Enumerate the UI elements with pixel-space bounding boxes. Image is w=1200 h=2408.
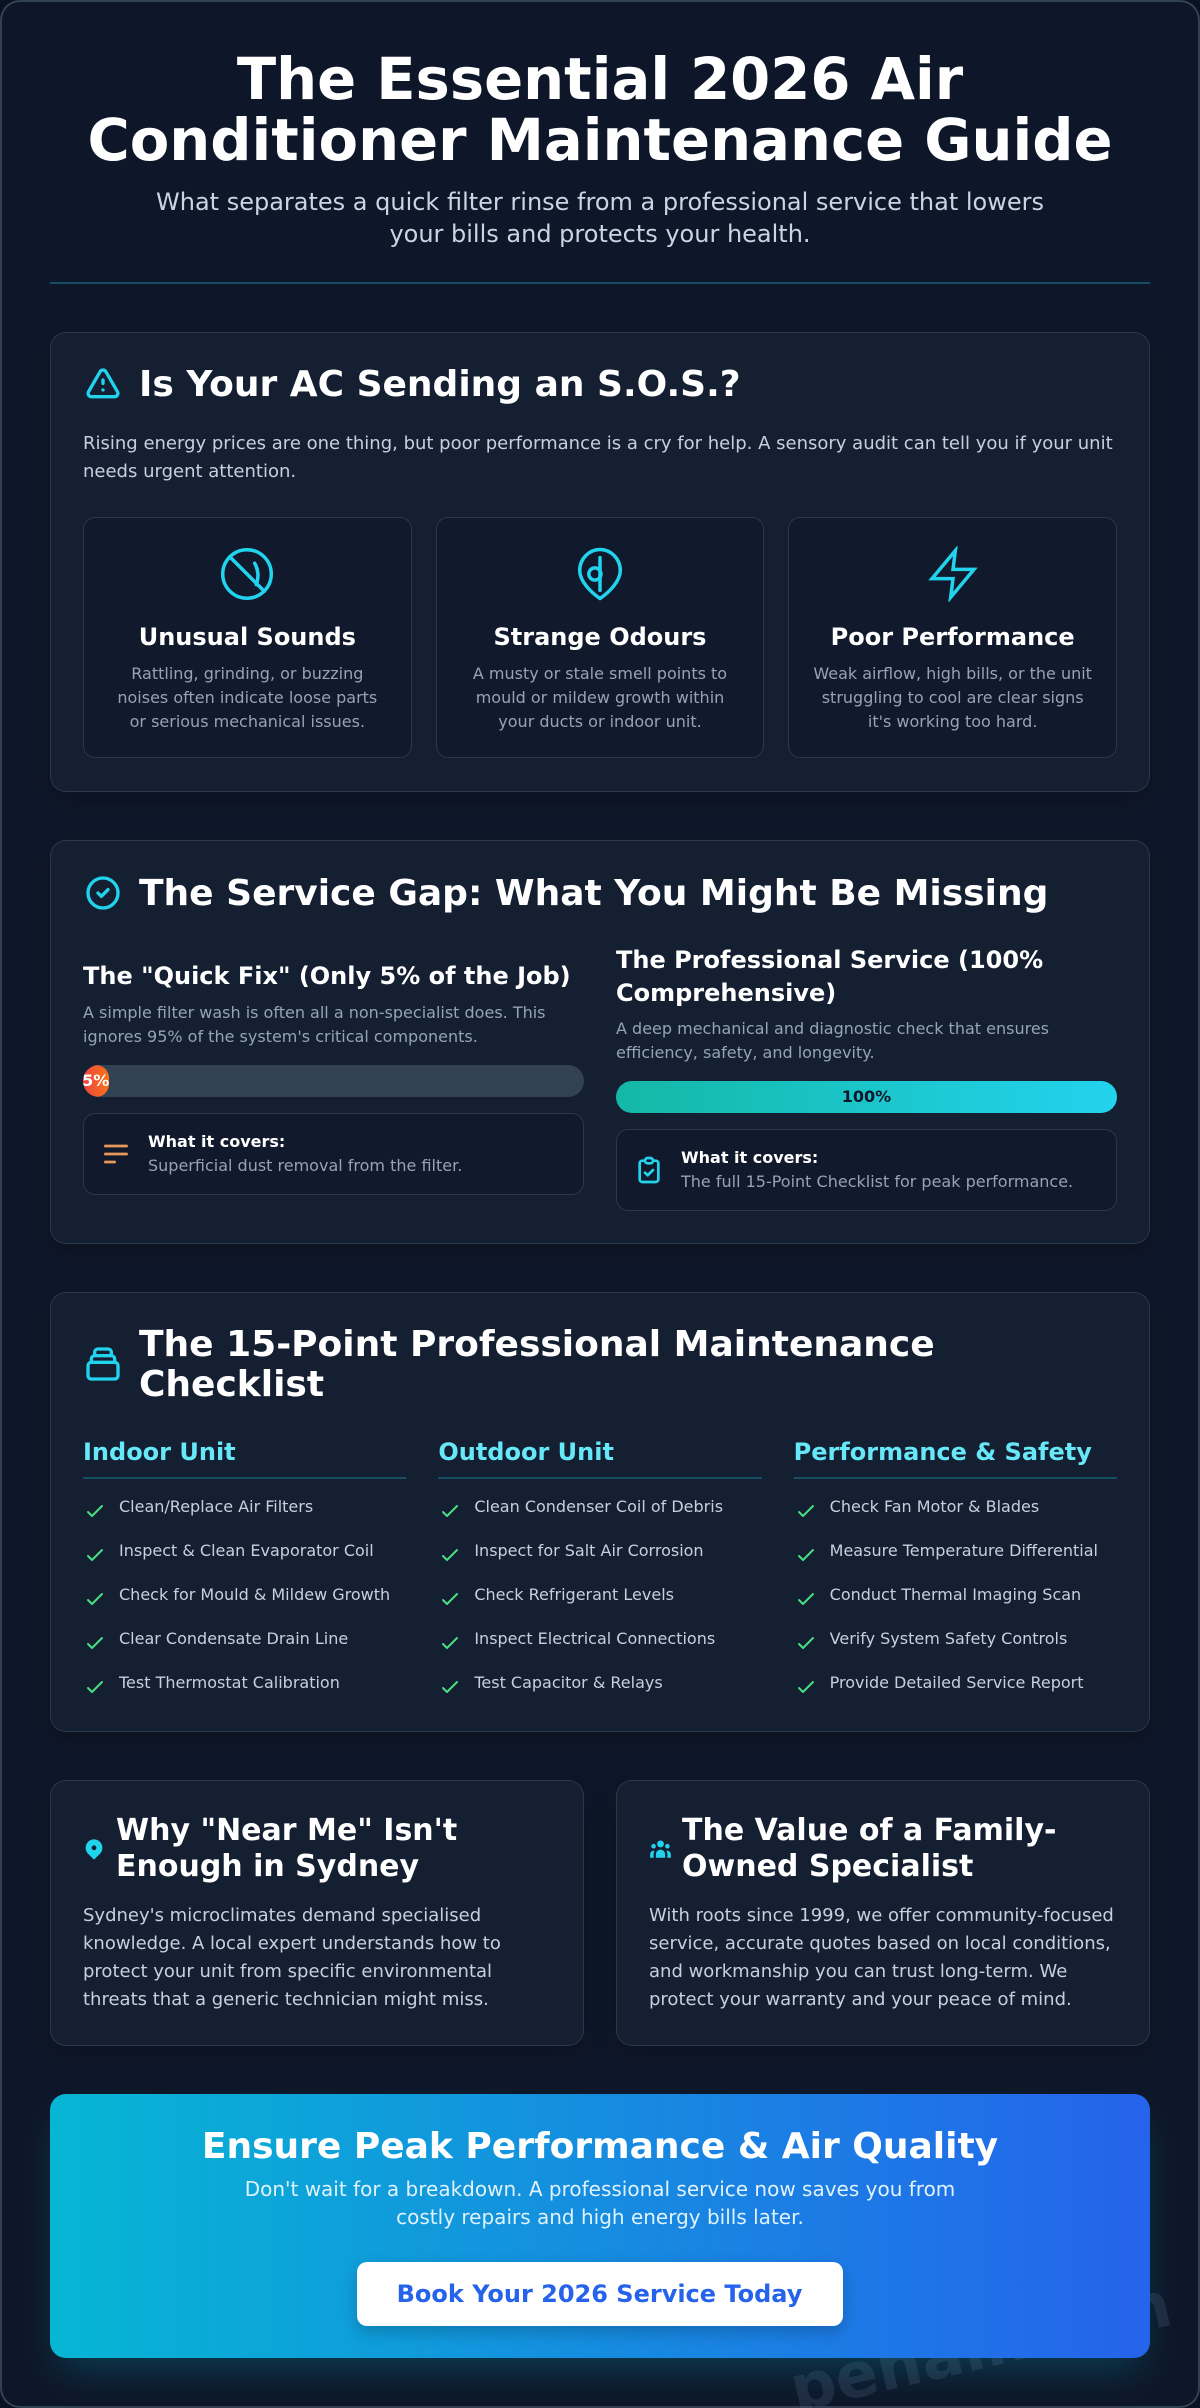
item: thermal imaging: Conduct Thermal Imaging Scan: [830, 1584, 1081, 1604]
text: near me: [83, 1902, 501, 2015]
panel: warning signs: [50, 332, 1150, 792]
icon: location pin: [86, 1839, 102, 1860]
description: strange odours: your ducts or indoor unit.: [498, 712, 702, 731]
panel: 15-point checklist: [50, 1292, 1150, 1732]
column: indoor unit: [83, 1438, 406, 1693]
column: performance and safety: [794, 1438, 1117, 1693]
heading: near me: Why "Near Me" Isn't: [116, 1813, 457, 1848]
icon: lightning bolt: [928, 546, 978, 602]
item: mould and mildew: Check for Mould & Mildew Growth: [119, 1584, 390, 1604]
heading: family owned: The Value of a Family-: [682, 1813, 1056, 1848]
progress bar: 5%: [83, 1065, 584, 1097]
icon: sound ban: [221, 548, 273, 600]
item: safety controls: Verify System Safety Controls: [830, 1628, 1067, 1648]
heading: service gap: The Service Gap: What You Might Be Missing: [139, 872, 1048, 914]
progress bar: 100%: 100%: [842, 1087, 891, 1106]
text: family owned: service, accurate quotes based on local conditions,: [649, 1933, 1111, 1954]
text: call to action: Don't wait for a breakdown. A professional service now saves you from: [245, 2176, 955, 2200]
item: condensate drain: Clear Condensate Drain Line: [119, 1628, 348, 1648]
heading: quick fix: The "Quick Fix" (Only 5% of the Job): [83, 962, 571, 990]
heading: near me: [116, 1813, 457, 1884]
description: quick fix: ignores 95% of the system's critical components.: [83, 1027, 478, 1046]
icon: check circle: [86, 876, 120, 910]
description: strange odours: mould or mildew growth within: [476, 688, 724, 707]
progress bar: 100%: [616, 1081, 1117, 1113]
text: near me: Sydney's microclimates demand specialised: [83, 1905, 481, 1926]
description: quick fix: A simple filter wash is often all a non-specialist does. This: [83, 1002, 546, 1022]
text: family owned: protect your warranty and your peace of mind.: [649, 1989, 1072, 2010]
heading: professional service: [616, 946, 1043, 1007]
text: near me: knowledge. A local expert understands how to: [83, 1933, 501, 1954]
label: what it covers: What it covers:: [148, 1132, 285, 1150]
heading: checklist: Checklist: [139, 1364, 324, 1405]
text: family owned: [649, 1902, 1114, 2015]
icon: short lines: [104, 1144, 128, 1164]
heading: professional service: The Professional Service (100%: [616, 946, 1043, 974]
description: unusual sounds: or serious mechanical issues.: [130, 712, 365, 731]
heading: professional service: Comprehensive): [616, 979, 836, 1007]
icon: people group: [648, 1837, 672, 1860]
text: quick fix coverage: Superficial dust removal from the filter.: [148, 1156, 462, 1175]
title: Conditioner Maintenance Guide: [87, 106, 1113, 174]
heading: poor performance: Poor Performance: [831, 623, 1075, 651]
intro text: needs urgent attention.: [83, 461, 296, 482]
heading: call to action: Ensure Peak Performance & Air Quality: [202, 2126, 998, 2166]
heading: performance and safety: Performance & Safety: [794, 1438, 1092, 1466]
item: condenser coil: Clean Condenser Coil of Debris: [474, 1496, 723, 1516]
text: call to action: costly repairs and high energy bills later.: [396, 2205, 804, 2229]
heading: family owned: [682, 1813, 1056, 1885]
intro text: [83, 432, 1113, 482]
heading: strange odours: Strange Odours: [494, 623, 706, 651]
button: book service: [356, 2262, 842, 2326]
subtitle: your bills and protects your health.: [389, 220, 811, 248]
icon: clipboard check: [638, 1156, 660, 1184]
description: poor performance: Weak airflow, high bills, or the unit: [813, 664, 1092, 682]
description: professional service: [616, 1018, 1049, 1062]
panel: family owned: [616, 1780, 1150, 2046]
item: evaporator coil: Inspect & Clean Evaporator Coil: [119, 1540, 374, 1560]
heading: family owned: Owned Specialist: [682, 1849, 973, 1884]
icon: warning triangle: [86, 368, 120, 398]
item: air filters: Clean/Replace Air Filters: [119, 1496, 313, 1516]
heading: checklist: The 15-Point Professional Maintenance: [139, 1324, 935, 1365]
text: near me: protect your unit from specific environmental: [83, 1961, 492, 1982]
heading: warning signs: Is Your AC Sending an S.O.S.?: [139, 364, 741, 405]
text: near me: threats that a generic technician might miss.: [83, 1989, 489, 2010]
item: service report: Provide Detailed Service Report: [830, 1672, 1084, 1692]
text: family owned: and workmanship you can trust long-term. We: [649, 1961, 1067, 1982]
heading: outdoor unit: Outdoor Unit: [438, 1438, 614, 1466]
item: capacitor: Test Capacitor & Relays: [474, 1672, 663, 1692]
subtitle: What separates a quick filter rinse from a professional service that lowers: [156, 188, 1044, 216]
text: family owned: With roots since 1999, we offer community-focused: [649, 1905, 1114, 1926]
callout: professional coverage: [616, 1129, 1117, 1211]
description: unusual sounds: Rattling, grinding, or buzzing: [131, 664, 363, 682]
item: electrical: Inspect Electrical Connections: [474, 1628, 715, 1648]
description: strange odours: A musty or stale smell points to: [473, 664, 727, 682]
column: professional service: [616, 946, 1117, 1211]
description: unusual sounds: [117, 664, 377, 731]
heading: checklist: [139, 1324, 935, 1405]
item: temperature: Measure Temperature Differential: [830, 1540, 1098, 1560]
card: strange odours: [436, 517, 764, 758]
subtitle: [156, 188, 1044, 248]
description: quick fix: [83, 1002, 546, 1046]
column: outdoor unit: [438, 1438, 762, 1693]
icon: stacked collection: [86, 1347, 120, 1381]
text: professional coverage: The full 15-Point Checklist for peak performance.: [681, 1172, 1073, 1191]
text: call to action: [50, 2174, 1150, 2231]
heading: unusual sounds: Unusual Sounds: [139, 623, 356, 651]
item: thermostat: Test Thermostat Calibration: [119, 1672, 340, 1692]
panel: near me: [50, 1780, 584, 2046]
item: refrigerant: Check Refrigerant Levels: [474, 1584, 674, 1604]
panel: service gap: [50, 840, 1150, 1244]
title: The Essential 2026 Air: [237, 46, 963, 113]
column: quick fix: [83, 962, 584, 1195]
label: what it covers: What it covers:: [681, 1148, 818, 1166]
bar fill: 5%: [83, 1065, 108, 1097]
description: professional service: efficiency, safety, and longevity.: [616, 1043, 875, 1062]
description: professional service: A deep mechanical and diagnostic check that ensures: [616, 1018, 1049, 1038]
description: poor performance: [813, 664, 1092, 731]
card: poor performance: [788, 517, 1117, 758]
heading: indoor unit: Indoor Unit: [83, 1438, 236, 1466]
description: poor performance: it's working too hard.: [868, 712, 1037, 731]
intro text: Rising energy prices are one thing, but poor performance is a cry for help. A sensory audit can tell you if your unit: [83, 432, 1113, 454]
description: unusual sounds: noises often indicate loose parts: [117, 688, 377, 707]
item: salt air: Inspect for Salt Air Corrosion: [474, 1540, 704, 1560]
description: strange odours: [473, 664, 727, 731]
description: poor performance: struggling to cool are clear signs: [822, 688, 1084, 707]
card: unusual sounds: [83, 517, 412, 758]
title: [87, 46, 1113, 174]
callout: quick fix coverage: [83, 1113, 584, 1195]
call to action: [50, 2094, 1150, 2358]
icon: odour drop: [578, 548, 622, 600]
heading: near me: Enough in Sydney: [116, 1849, 419, 1884]
item: fan motor: Check Fan Motor & Blades: [830, 1496, 1039, 1516]
button: book service: Book Your 2026 Service Today: [397, 2280, 802, 2308]
